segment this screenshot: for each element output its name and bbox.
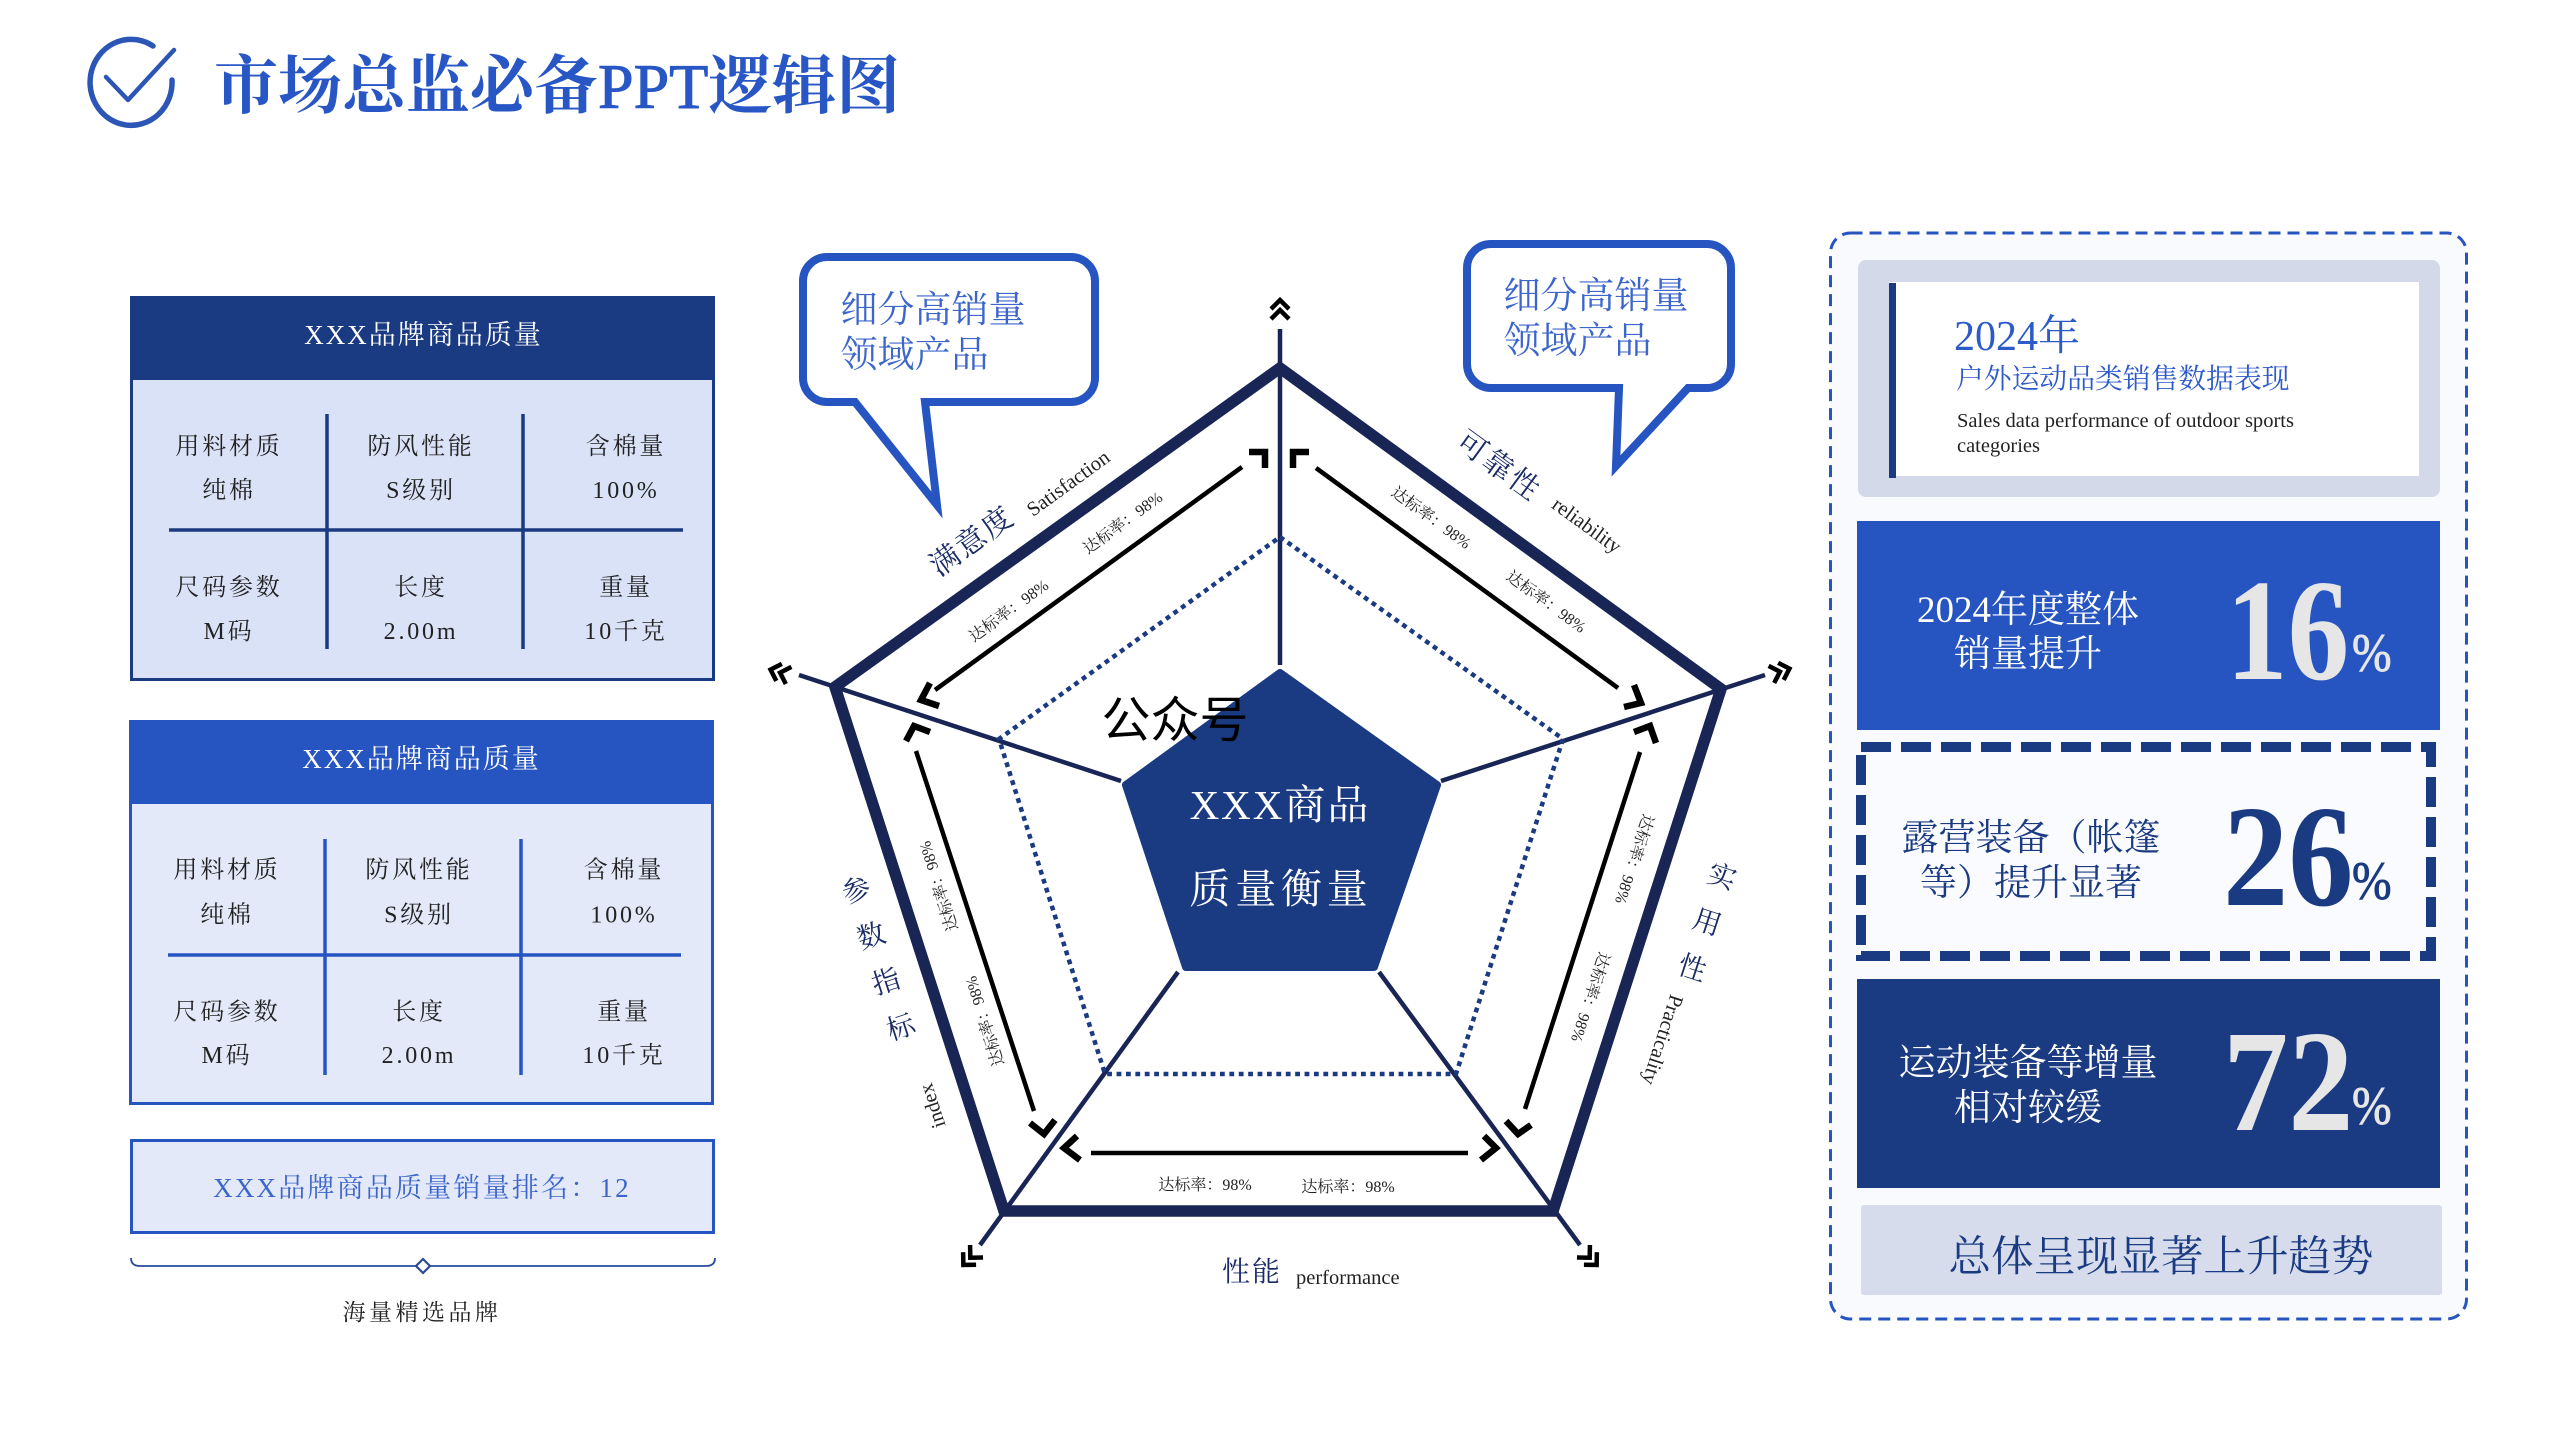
panel: summary header: categories [1957,435,2040,457]
label: performance: performance [1296,1267,1400,1289]
panel: brand quality table blue: 2.00m [382,1043,456,1069]
panel: brand quality table blue: 含棉量 [584,856,664,884]
rate labels: 达标率：98% [962,974,1008,1068]
brace with diamond [131,1258,715,1273]
center pentagon [1126,673,1437,967]
label: reliability: reliability [1548,493,1626,559]
panel: stat 16%: % [2352,624,2392,684]
panel: brand quality table dark: 100% [592,478,660,504]
panel: brand quality table blue: 尺码参数 [173,998,281,1026]
rate labels: 达标率：98% [916,839,962,933]
callout right: 领域产品 [1504,320,1652,362]
center pentagon: XXX商品 [1190,782,1370,828]
panel: brand quality table dark: S级别 [386,477,456,504]
panel: stat 26% [1861,747,2431,956]
label: satisfaction: Satisfaction [1023,446,1114,521]
panel: brand quality table blue: S级别 [384,902,454,928]
label: satisfaction [924,446,1114,583]
watermark text: 公众号 [1101,681,1249,752]
panel: brand quality table dark: 用料材质 [175,433,283,460]
panel: stat 72%: 72 [2223,1001,2353,1162]
panel: summary header: Sales data performance of outdoor sports [1957,410,2294,432]
label: practicality: 实用性 [1665,856,1740,1004]
label: reliability [1450,425,1626,559]
rate labels [916,483,1657,1196]
icon: check mark in circle [90,39,174,125]
panel: brand quality table dark: XXX品牌商品质量 [304,320,543,350]
label: satisfaction: 满意度 [924,500,1021,583]
panel: brand quality table blue: M码 [202,1043,252,1069]
panel: brand quality table blue: 10千克 [582,1042,666,1069]
title: 市场总监必备PPT逻辑图 [214,51,900,122]
panel: summary header: 户外运动品类销售数据表现 [1956,364,2290,395]
panel: brand quality table dark: 重量 [599,574,653,601]
rate labels: 达标率：98% [1080,488,1166,558]
label: practicality: Practicality [1637,992,1687,1088]
panel: brand quality table dark: 2.00m [384,619,458,645]
panel: stat 26%: % [2352,852,2392,912]
rate labels: 达标率：98% [1158,1176,1252,1194]
rate labels: 达标率：98% [1567,950,1613,1044]
panel: brand quality table blue: 100% [590,902,658,928]
black inner lines with brackets [906,452,1656,1160]
panel: brand quality table blue: 长度 [392,998,446,1026]
panel: brand quality table dark: 10千克 [584,618,668,645]
rate labels: 达标率：98% [966,576,1052,646]
panel: conclusion: 总体呈现显著上升趋势 [1948,1234,2374,1281]
callout left: 领域产品 [840,334,988,376]
panel: sales rank [132,1140,714,1232]
label: practicality [1637,856,1740,1088]
rate labels: 达标率：98% [1301,1178,1395,1196]
panel: summary header [1858,260,2440,497]
dotted inner pentagon [999,537,1563,1074]
label: performance: 性能 [1222,1256,1282,1288]
panel: brand quality table blue [129,720,714,1104]
panel: stat 26%: 等）提升显著 [1920,862,2142,904]
panel: stat 72%: 运动装备等增量 [1898,1042,2158,1084]
panel: brand quality table dark: 长度 [394,574,448,601]
rate labels: 达标率：98% [1503,567,1589,637]
panel: summary header: 2024年 [1954,313,2080,360]
panel: right dashed container [1830,233,2466,1319]
label: performance [1222,1256,1400,1289]
panel: brand quality table blue: XXX品牌商品质量 [302,744,541,774]
callout left: 细分高销量 [840,289,1026,331]
label: index [834,871,950,1131]
panel: brand quality table blue: 重量 [597,998,651,1026]
callout right [1467,244,1731,466]
outer pentagon [835,368,1721,1211]
panel: stat 72% [1857,979,2440,1188]
label: index: 参数指标 [834,871,924,1064]
panel: brand quality table dark: 尺码参数 [175,574,283,601]
center pentagon: 质量衡量 [1189,866,1373,912]
panel: brand quality table dark [130,296,715,680]
callout left [803,257,1095,505]
panel: sales rank: XXX品牌商品质量销量排名：12 [213,1173,631,1203]
callout right: 细分高销量 [1504,275,1688,317]
panel: stat 72%: 相对较缓 [1954,1087,2102,1129]
panel: conclusion [1861,1205,2442,1295]
panel: brand quality table blue: 纯棉 [200,902,254,928]
panel: stat 26%: 26 [2223,776,2353,937]
label: reliability: 可靠性 [1450,425,1547,508]
panel: brand quality table blue: 用料材质 [173,856,281,884]
chevrons at axis ends [768,300,1792,1271]
panel: stat 16%: 16 [2226,551,2349,711]
rate labels: 达标率：98% [1388,483,1474,553]
panel: stat 16%: 销量提升 [1954,633,2102,675]
panel: brand quality table blue: 防风性能 [365,856,473,884]
panel: brand quality table dark: M码 [204,619,254,645]
caption: 海量精选品牌 [342,1300,502,1325]
panel: stat 26%: 露营装备（帐篷 [1902,817,2160,859]
panel: stat 16%: 2024年度整体 [1917,589,2139,631]
panel: brand quality table dark: 防风性能 [367,433,475,460]
panel: brand quality table dark: 含棉量 [586,433,666,460]
label: index: index [915,1081,950,1131]
rate labels: 达标率：98% [1611,812,1657,906]
panel: stat 16% [1857,521,2440,730]
panel: brand quality table dark: 纯棉 [202,477,256,504]
panel: stat 72%: % [2352,1077,2392,1137]
radar axes [799,329,1765,1245]
